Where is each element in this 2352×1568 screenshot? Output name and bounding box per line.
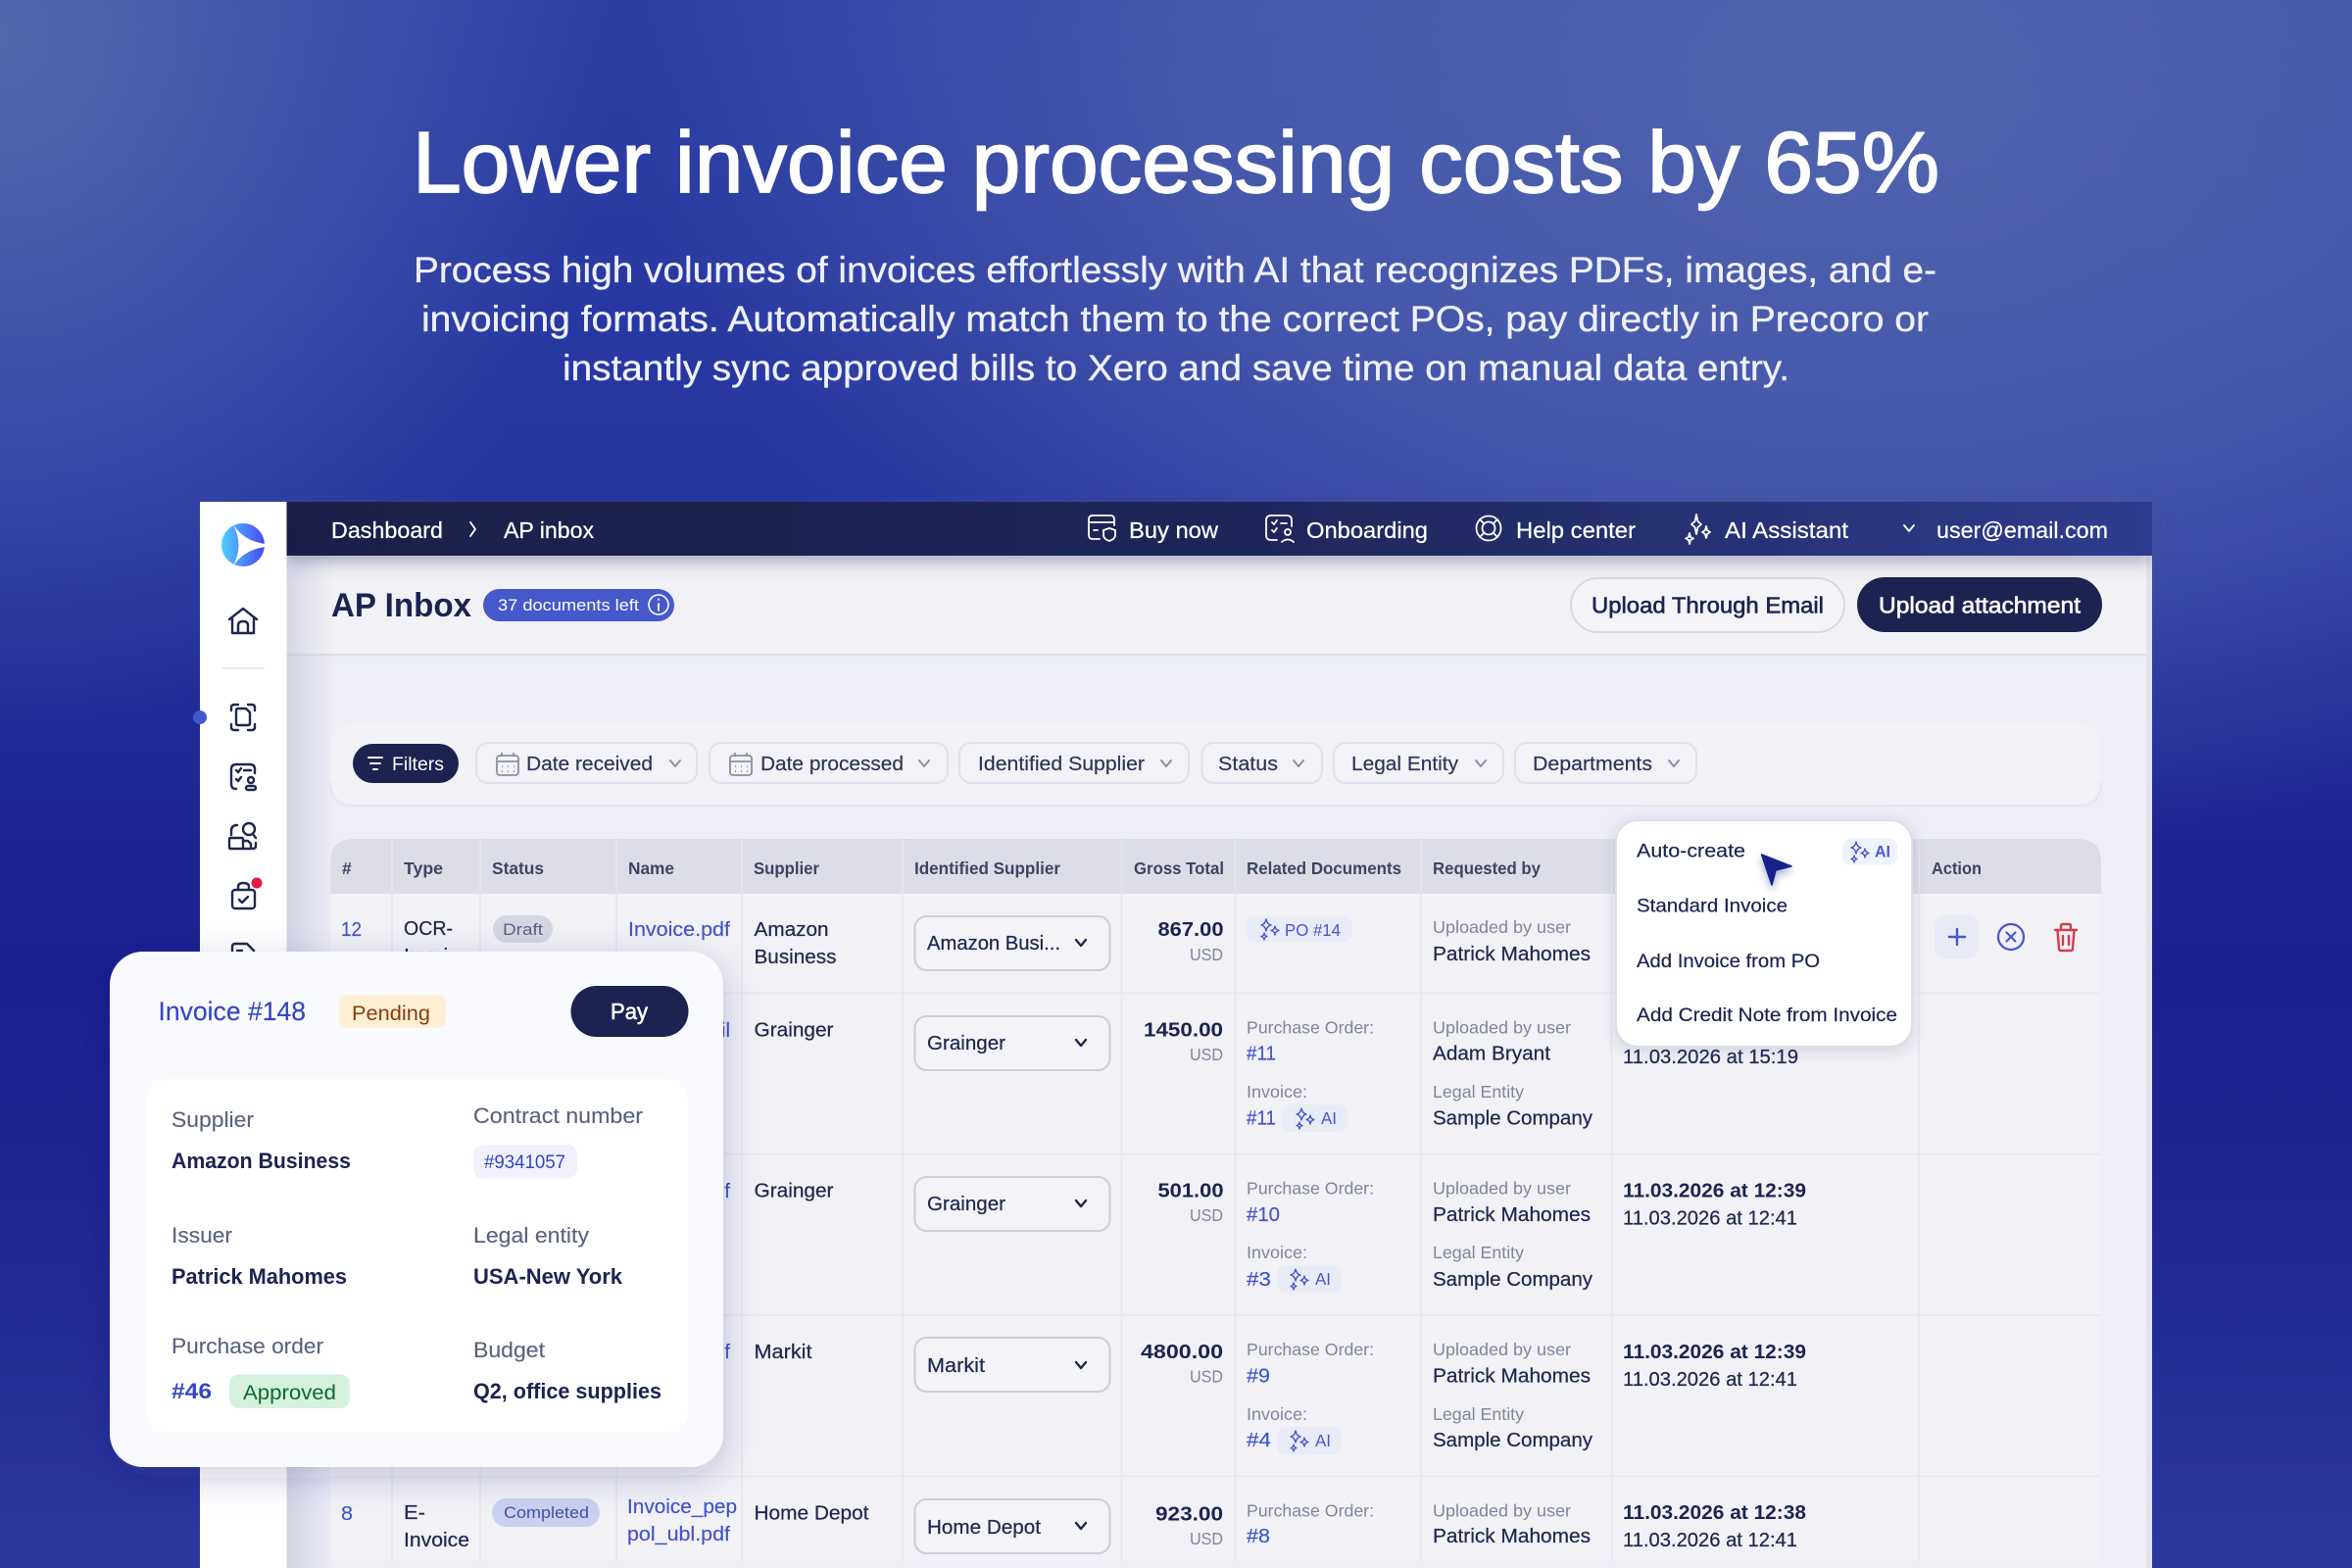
row 10: AI (1315, 1269, 1331, 1289)
icon: onboarding (1266, 515, 1294, 542)
filter: identified supplier: Identified Supplier (978, 753, 1145, 775)
app window (193, 502, 2152, 1568)
filter: legal entity: Legal Entity (1351, 753, 1459, 775)
row 10: Invoice.pdf (633, 1180, 730, 1202)
row 9: USD (1190, 1366, 1223, 1386)
row 12: 12 (341, 918, 362, 941)
row 8: USD (1190, 1529, 1223, 1548)
table header: Identified Supplier (914, 858, 1060, 878)
row 8: 923.00 (1155, 1503, 1223, 1525)
panel: sidebar (193, 502, 286, 1568)
row 12: Invoice (404, 945, 470, 967)
badge: documents left: 37 documents left (498, 597, 639, 614)
row 9: #4 (1247, 1429, 1271, 1451)
row 11: Sample Company (1433, 1107, 1593, 1129)
button: upload through email: Upload Through Email (1592, 592, 1824, 617)
dropdown menu: Add Credit Note from Invoice (1637, 1004, 1897, 1026)
row 8: Invoice (404, 1529, 469, 1551)
row 9: Invoice: (1247, 1404, 1307, 1424)
panel: top navigation bar: user@email.com (1936, 517, 2108, 543)
filters button: Filters (392, 755, 444, 775)
row 9: Purchase Order: (1247, 1340, 1374, 1359)
row 10: Grainger (755, 1180, 834, 1201)
panel: invoice details: Amazon Business (172, 1149, 351, 1173)
panel: invoice details (145, 1079, 688, 1433)
table header: Supplier (754, 858, 819, 878)
row 10: USD (1190, 1205, 1223, 1225)
table header: Requested by (1433, 858, 1541, 878)
row 12: Amazon (755, 918, 829, 941)
row 10: Purchase Order: (1247, 1178, 1374, 1198)
row 9: 4800.00 (1141, 1341, 1223, 1363)
button: upload attachment (1857, 577, 2102, 632)
table header: Action (1932, 858, 1982, 878)
row 8: Home Depot (927, 1516, 1041, 1539)
icon: purchase bag (232, 883, 255, 908)
panel: invoice detail card: Invoice #148 (159, 997, 306, 1026)
row 10: Patrick Mahomes (1433, 1203, 1591, 1226)
row 10 (633, 1177, 1806, 1293)
row 10: #3 (1247, 1268, 1271, 1291)
panel: top navigation bar: AP inbox (504, 517, 594, 543)
button: upload attachment: Upload attachment (1879, 592, 2081, 617)
icon: approvals (231, 764, 256, 790)
row 8: 11.03.2026 at 12:38 (1623, 1501, 1806, 1524)
action: delete (2055, 924, 2077, 951)
row 9: #9 (1247, 1364, 1270, 1388)
table header: Type (404, 858, 443, 878)
row 8: E- (404, 1501, 425, 1524)
dropdown menu: Standard Invoice (1637, 896, 1788, 917)
panel: invoice details: Purchase order (172, 1334, 323, 1358)
row 8: Invoice_pep (627, 1495, 737, 1518)
row 10: 501.00 (1158, 1180, 1223, 1201)
table header: Name (628, 858, 674, 878)
table header (330, 839, 2101, 894)
row 12: OCR- (404, 917, 453, 940)
row 12: Uploaded by user (1433, 917, 1571, 937)
row 12: 867.00 (1158, 918, 1223, 941)
AI chip: PO #14 (1247, 916, 1351, 942)
panel: invoice details: Supplier (172, 1107, 255, 1132)
row 9: 11.03.2026 at 12:39 (1623, 1341, 1806, 1363)
panel: top navigation bar: AI Assistant (1725, 517, 1848, 543)
panel: invoice details: Budget (473, 1338, 546, 1362)
row 10: Sample Company (1433, 1268, 1593, 1291)
filter: departments (1515, 743, 1696, 783)
subtitle text block: Process high volumes of invoices effortlessly with AI that recognizes PDFs, images, and e- (414, 250, 1936, 290)
panel: main content background (286, 502, 2152, 1568)
table header: Related Documents (1247, 858, 1401, 878)
notification dot (251, 878, 263, 888)
status chip: completed (492, 1498, 600, 1527)
status chip: pending: Pending (352, 1002, 430, 1025)
row 12 (341, 915, 2077, 970)
AI chip: AI (1875, 843, 1890, 860)
icon: help center (1476, 515, 1501, 541)
filter: date processed (710, 743, 948, 783)
subtitle text block: invoicing formats. Automatically match them to the correct POs, pay directly in Precoro or (421, 299, 1929, 339)
row 11: 1450.00 (1144, 1019, 1223, 1041)
user chevron (1904, 525, 1914, 531)
panel: invoice details: Patrick Mahomes (172, 1264, 347, 1289)
row 10: 11.03.2026 at 12:41 (1623, 1207, 1797, 1229)
badge: documents left (483, 589, 674, 621)
title: Lower invoice processing costs by 65% (413, 114, 1939, 211)
AI chip (1842, 839, 1897, 864)
panel: invoice detail card (110, 952, 723, 1467)
dropdown menu: Add Invoice from PO (1637, 951, 1820, 972)
logo (221, 523, 266, 567)
filter: status (1201, 743, 1322, 783)
row 11: Uploaded by user (1433, 1017, 1571, 1037)
row 11: USD (1190, 1045, 1223, 1064)
icon: document partial (232, 944, 254, 965)
row 8 (341, 1495, 1806, 1553)
button: pay (570, 986, 688, 1037)
subtitle text block (414, 250, 1936, 388)
action: reject (1998, 924, 2024, 950)
panel: top navigation bar: Help center (1516, 517, 1636, 543)
row 8: Uploaded by user (1433, 1501, 1571, 1521)
icon: AI assistant (1686, 514, 1710, 544)
row 11: Invoice_email (608, 1019, 730, 1042)
row 11: Grainger (927, 1032, 1005, 1054)
row 11: AI (1321, 1108, 1337, 1128)
row 11: Grainger (755, 1019, 834, 1041)
panel: top navigation bar: Buy now (1129, 517, 1219, 543)
row 9: AI (1315, 1431, 1331, 1450)
filter: date received: Date received (526, 753, 653, 775)
row 8: Patrick Mahomes (1433, 1525, 1591, 1547)
icon: document scan (231, 705, 255, 730)
active indicator dot (193, 710, 207, 724)
grid lines (330, 839, 2101, 1560)
row 8: pol_ubl.pdf (627, 1523, 730, 1545)
row 12: USD (1190, 945, 1223, 964)
dropdown menu (1616, 820, 1912, 1047)
filter: status: Status (1218, 753, 1278, 775)
dropdown menu: Auto-create (1637, 841, 1745, 862)
row 11: #11 (1247, 1043, 1276, 1064)
row 9: Sample Company (1433, 1429, 1593, 1451)
row 8: #8 (1247, 1525, 1270, 1547)
row 8: 8 (341, 1502, 353, 1525)
row 9: 11.03.2026 at 12:41 (1623, 1368, 1797, 1391)
breadcrumb chevron (470, 522, 475, 536)
AI chip: PO #14: PO #14 (1285, 920, 1341, 940)
panel: invoices table (330, 839, 2101, 1560)
row 9: Invoice.pdf (633, 1341, 730, 1363)
row 11: Adam Bryant (1433, 1043, 1550, 1064)
row 8: 11.03.2026 at 12:41 (1623, 1529, 1797, 1551)
row 12: Business (755, 946, 837, 968)
row 8: Purchase Order: (1247, 1501, 1374, 1521)
panel: invoice details: Legal entity (473, 1223, 590, 1248)
icon: mouse cursor (1762, 855, 1791, 885)
row 10: #10 (1247, 1203, 1280, 1226)
button: pay: Pay (611, 999, 648, 1024)
row 10: Uploaded by user (1433, 1178, 1571, 1198)
filter: date processed: Date processed (760, 753, 904, 775)
row 12: Invoice.pdf (628, 918, 730, 941)
row 10: 11.03.2026 at 12:39 (1623, 1180, 1806, 1201)
panel: filters (330, 722, 2101, 806)
row 9: Markit (755, 1341, 812, 1363)
heading: AP Inbox: AP Inbox (331, 587, 471, 624)
row 9: Legal Entity (1433, 1404, 1524, 1424)
filter: date received (476, 743, 697, 783)
status chip: draft: Draft (503, 920, 543, 939)
row 12: Patrick Mahomes (1433, 943, 1591, 965)
icon: home (229, 609, 257, 633)
row 9 (633, 1338, 1806, 1454)
filter: departments: Departments (1533, 753, 1652, 775)
filters button (353, 744, 459, 783)
panel: top navigation bar: Dashboard (331, 517, 443, 543)
panel: invoice details: Contract number (473, 1103, 644, 1128)
panel: invoice details: #46 (172, 1379, 212, 1403)
table header: Gross Total (1134, 858, 1224, 878)
subtitle text block: instantly sync approved bills to Xero and save time on manual data entry. (563, 348, 1789, 388)
contract number chip (473, 1145, 577, 1178)
supplier select (915, 916, 1109, 970)
status chip: approved: Approved (243, 1381, 336, 1404)
row 10: Grainger (927, 1193, 1005, 1215)
icon: buy now (1089, 515, 1115, 541)
status chip: draft (493, 915, 553, 943)
status chip: completed: Completed (504, 1503, 589, 1522)
row 10: Legal Entity (1433, 1243, 1524, 1262)
row 11: #11 (1247, 1107, 1276, 1129)
button: upload through email (1571, 578, 1844, 632)
icon: supplier search (229, 823, 256, 849)
filter: identified supplier (959, 743, 1189, 783)
row 10: Invoice: (1247, 1243, 1307, 1262)
status chip: approved (229, 1374, 350, 1408)
panel: invoice details: Q2, office supplies (473, 1379, 662, 1403)
supplier select: Amazon Busi... (927, 932, 1060, 955)
row 9: Uploaded by user (1433, 1340, 1571, 1359)
action: add (1935, 915, 1979, 958)
row 11: Purchase Order: (1247, 1017, 1374, 1037)
row 9: Patrick Mahomes (1433, 1364, 1591, 1388)
contract number chip: #9341057 (484, 1152, 565, 1173)
panel: top navigation bar: Onboarding (1306, 517, 1428, 543)
status chip: pending (339, 995, 446, 1028)
row 11: Invoice: (1247, 1082, 1307, 1102)
filter: legal entity (1334, 743, 1503, 783)
table header: Status (492, 858, 544, 878)
row 9: Markit (927, 1354, 985, 1377)
panel: invoice details: Issuer (172, 1223, 233, 1248)
row 11: Legal Entity (1433, 1082, 1524, 1102)
row 11: 11.03.2026 at 15:19 (1623, 1046, 1798, 1068)
row 11 (608, 1016, 1798, 1132)
panel: top navigation bar (286, 502, 2152, 556)
table header: # (342, 858, 352, 878)
row 8: Home Depot (755, 1501, 869, 1525)
panel: invoice details: USA-New York (473, 1264, 622, 1289)
